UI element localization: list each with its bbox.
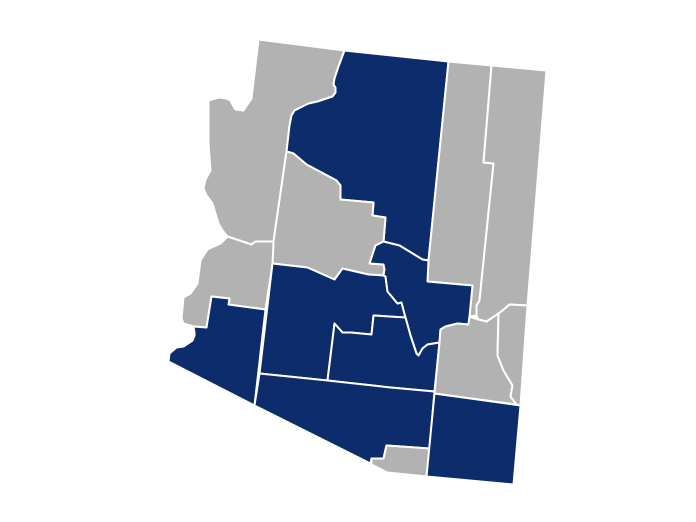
county: Navajo bbox=[428, 62, 494, 316]
county: Cochise bbox=[426, 394, 520, 484]
county: Yuma bbox=[168, 296, 266, 406]
county: Yavapai bbox=[272, 152, 386, 280]
county: Gila bbox=[370, 242, 472, 356]
county group bbox=[168, 40, 546, 484]
county: Coconino bbox=[286, 50, 448, 260]
county: Pima bbox=[254, 374, 434, 464]
county: Mohave bbox=[204, 40, 344, 244]
county: Graham bbox=[434, 314, 516, 404]
county: Maricopa bbox=[260, 264, 406, 380]
county: Santa Cruz bbox=[372, 446, 430, 476]
county: Apache bbox=[476, 66, 546, 322]
county: Greenlee bbox=[498, 304, 528, 406]
county: La Paz bbox=[182, 236, 274, 328]
county: Pinal bbox=[328, 316, 440, 392]
